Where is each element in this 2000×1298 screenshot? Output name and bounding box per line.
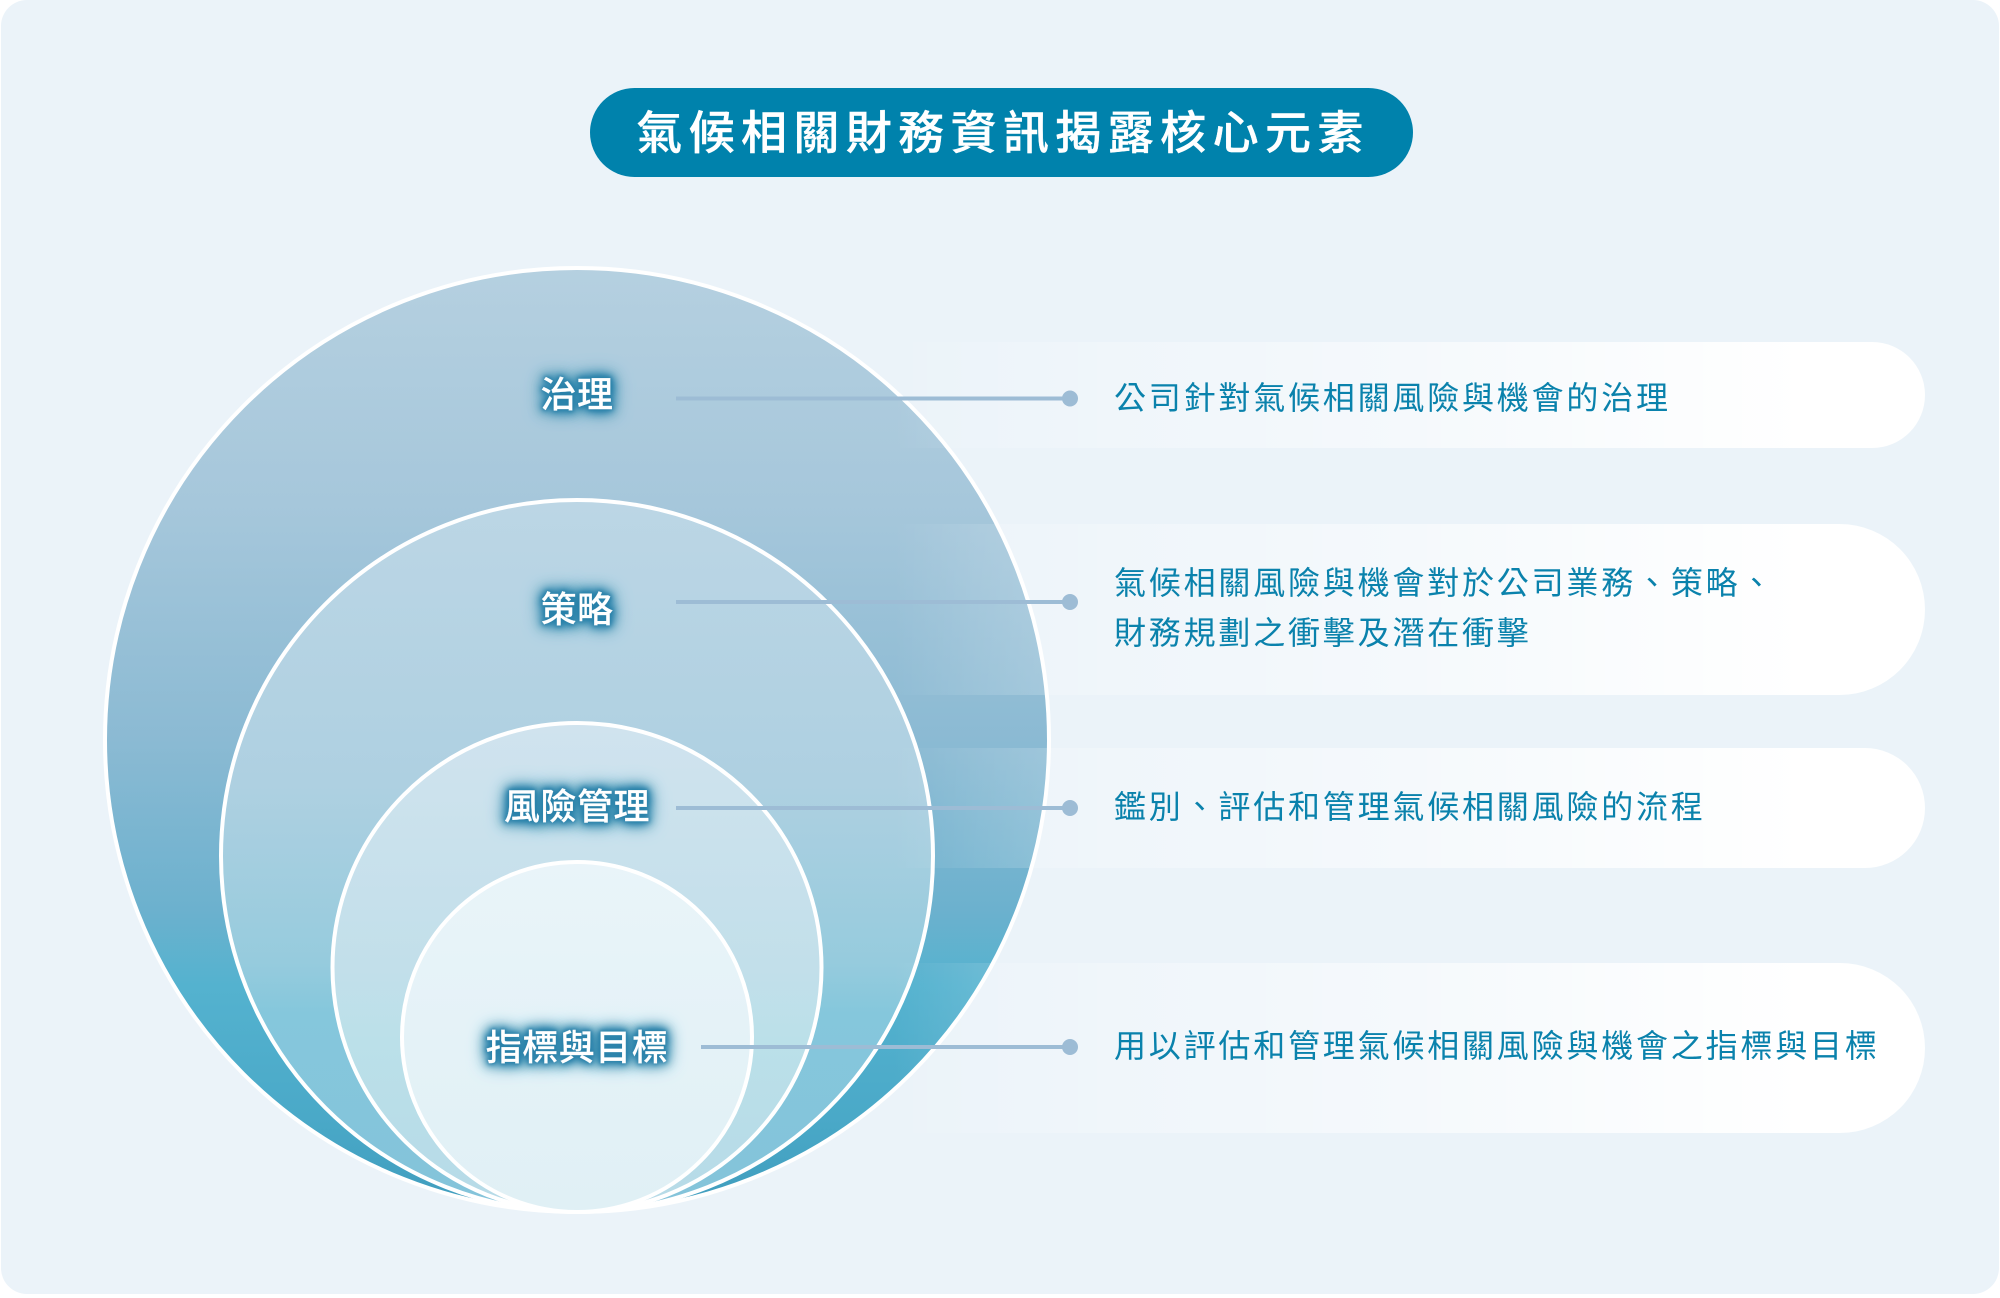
circle: 治理 xyxy=(105,268,1049,1212)
panel: metrics description xyxy=(893,963,1925,1133)
connector: 策略 xyxy=(676,594,1078,610)
panel: governance description xyxy=(893,342,1925,448)
label: 治理: 治理 xyxy=(540,374,614,415)
connector: 治理 xyxy=(676,390,1078,406)
text: strategy description: 財務規劃之衝擊及潛在衝擊 xyxy=(1114,615,1532,651)
text: risk management description: 鑑別、評估和管理氣候相關風險的流程 xyxy=(1114,789,1706,825)
circle: 指標與目標 xyxy=(402,862,752,1212)
panel: risk management description xyxy=(893,748,1925,868)
circle: 風險管理 xyxy=(332,723,822,1212)
label: 風險管理: 風險管理 xyxy=(504,786,650,827)
title pill xyxy=(590,88,1413,177)
text: strategy description xyxy=(1114,565,1775,651)
label: 指標與目標: 指標與目標 xyxy=(486,1027,668,1068)
circle: 策略 xyxy=(221,500,933,1212)
text: governance description: 公司針對氣候相關風險與機會的治理 xyxy=(1114,380,1671,416)
connector: 風險管理 xyxy=(676,800,1078,816)
panel: strategy description xyxy=(893,524,1925,695)
title pill: 氣候相關財務資訊揭露核心元素 xyxy=(636,107,1370,159)
text: metrics description: 用以評估和管理氣候相關風險與機會之指標與目標 xyxy=(1114,1028,1880,1064)
label: 策略: 策略 xyxy=(540,589,614,630)
connector: 指標與目標 xyxy=(701,1039,1078,1055)
text: strategy description: 氣候相關風險與機會對於公司業務、策略、 xyxy=(1114,565,1775,601)
